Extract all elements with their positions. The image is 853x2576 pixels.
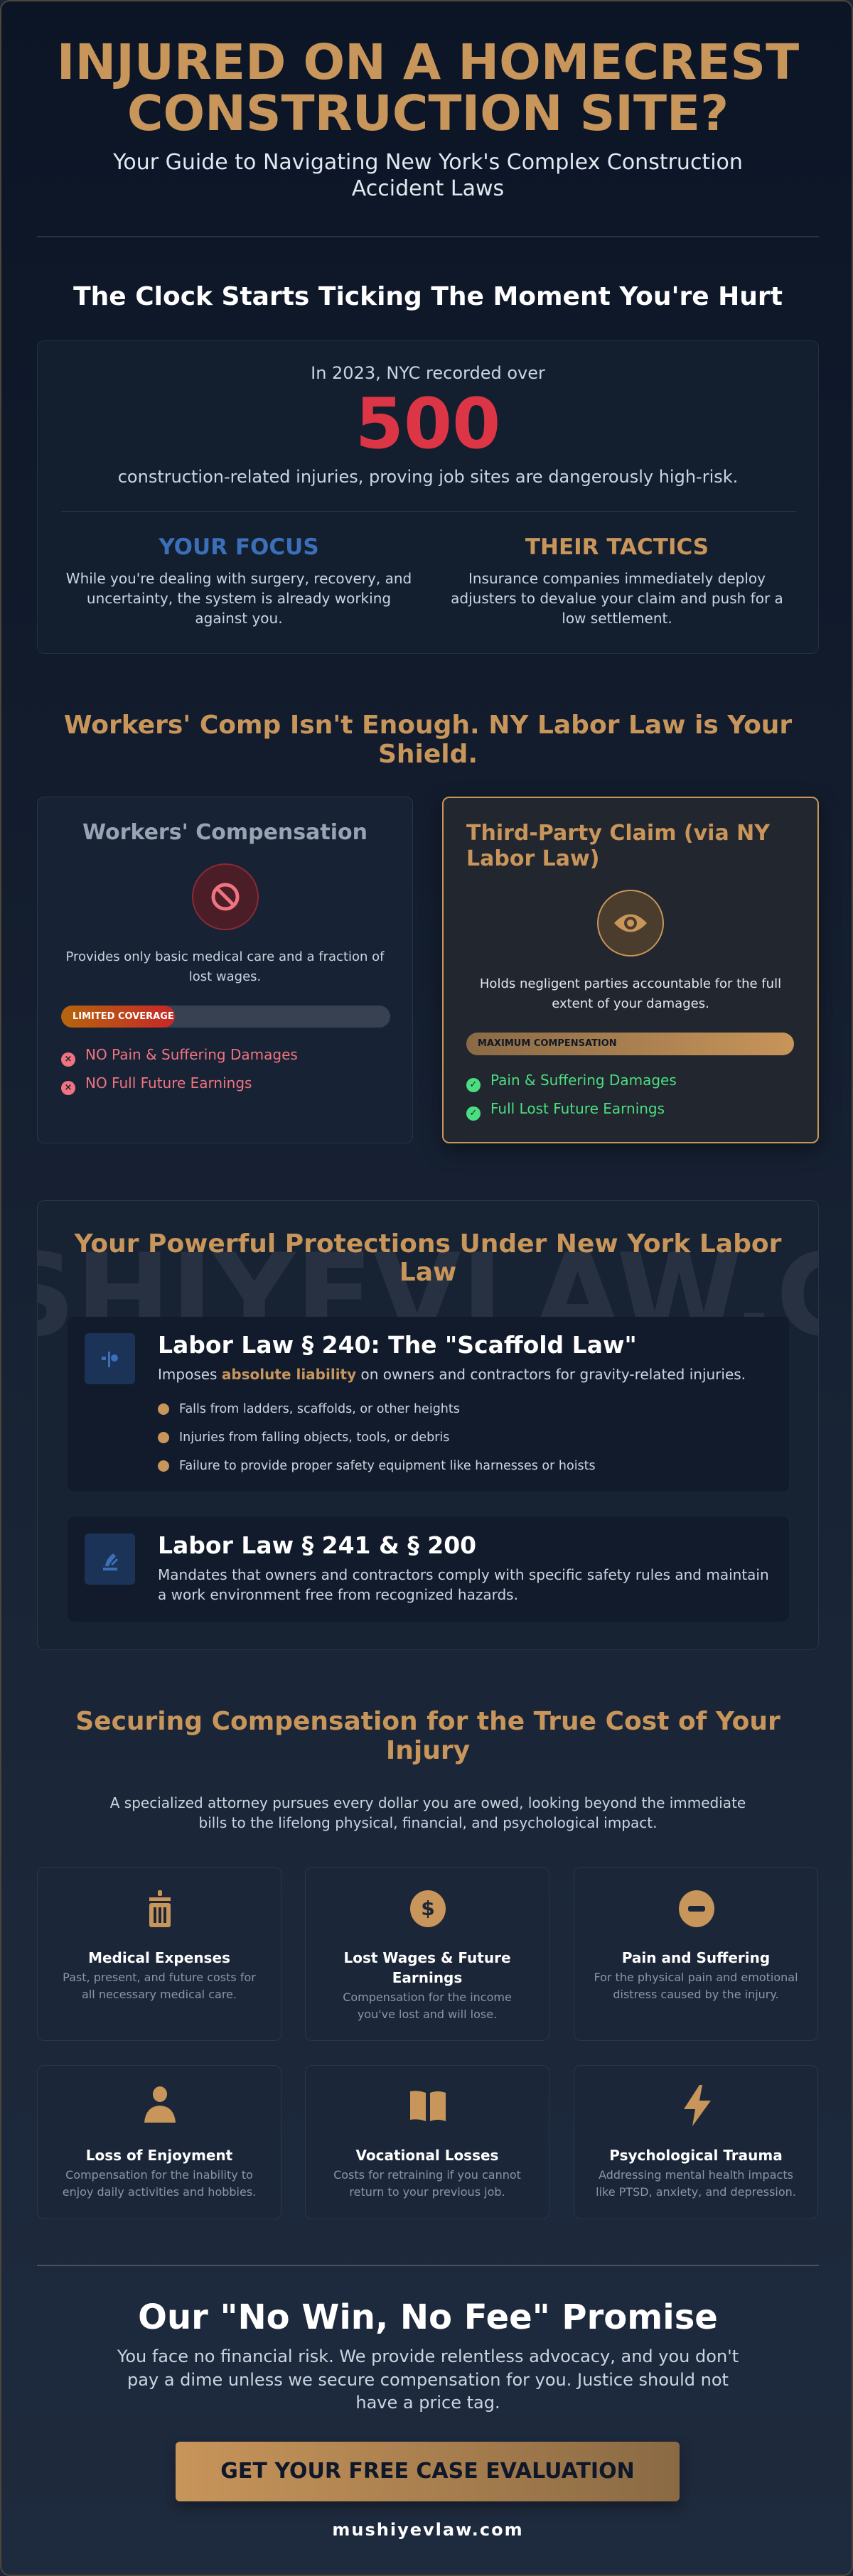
card: psychological trauma: Psychological Trauma xyxy=(609,2147,783,2164)
title xyxy=(57,34,799,142)
icon: coin xyxy=(410,1890,446,1927)
heading: protections xyxy=(74,1229,782,1287)
subtitle xyxy=(113,150,743,201)
stat intro: In 2023, NYC recorded over xyxy=(311,363,545,383)
list: positives: Pain & Suffering Damages xyxy=(490,1072,677,1089)
promise paragraph: You face no financial risk. We provide relentless advocacy, and you don't xyxy=(117,2346,739,2366)
heading: compensation: Injury xyxy=(386,1736,470,1765)
card text xyxy=(480,976,781,1011)
icon: coin: $ xyxy=(421,1897,435,1920)
card: loss of enjoyment xyxy=(37,2065,281,2219)
card text: a work environment free from recognized hazards. xyxy=(158,1586,518,1603)
button: cta xyxy=(176,2442,680,2501)
card text xyxy=(65,949,385,984)
subtitle: Your Guide to Navigating New York's Complex Construction xyxy=(113,150,743,175)
card text: Mandates that owners and contractors comply with specific safety rules and maintain xyxy=(158,1566,769,1583)
intro paragraph xyxy=(110,1794,746,1831)
card: lost wages xyxy=(305,1867,549,2041)
card: medical expenses xyxy=(37,1867,281,2041)
promise paragraph xyxy=(117,2346,739,2413)
list: positives: ✓ xyxy=(470,1079,477,1090)
card title: Workers' Compensation xyxy=(82,820,368,845)
bar: maximum compensation: MAXIMUM COMPENSATION xyxy=(478,1038,617,1049)
card: loss of enjoyment: Loss of Enjoyment xyxy=(86,2147,232,2164)
card: vocational losses: return to your previous job. xyxy=(349,2185,505,2199)
list: negatives: NO Pain & Suffering Damages xyxy=(85,1046,298,1063)
card: loss of enjoyment: enjoy daily activities and hobbies. xyxy=(63,2185,256,2199)
list: negatives xyxy=(61,1046,298,1095)
promise paragraph: pay a dime unless we secure compensation for you. Justice should not xyxy=(127,2369,729,2389)
card text xyxy=(158,1566,769,1603)
bar: limited coverage xyxy=(61,1006,390,1028)
column: their tactics: Insurance companies immediately deploy xyxy=(468,570,766,587)
list: covered injuries: Injuries from falling objects, tools, or debris xyxy=(179,1430,449,1445)
column: your focus xyxy=(66,534,412,627)
card: lost wages: you've lost and will lose. xyxy=(358,2008,497,2021)
card: medical expenses: Past, present, and future costs for xyxy=(63,1971,256,1984)
list: negatives: × xyxy=(65,1054,72,1065)
card: lost wages: Compensation for the income xyxy=(343,1990,512,2004)
card text: Provides only basic medical care and a fraction of xyxy=(65,949,385,964)
intro paragraph: A specialized attorney pursues every dollar you are owed, looking beyond the immediate xyxy=(110,1794,746,1811)
card: vocational losses xyxy=(305,2065,549,2219)
list: positives xyxy=(466,1072,677,1121)
bar: limited coverage: LIMITED COVERAGE xyxy=(73,1011,174,1022)
card: vocational losses: Costs for retraining if you cannot xyxy=(333,2168,521,2182)
card title xyxy=(466,821,771,871)
card title: Labor Law § 241 & § 200 xyxy=(158,1531,476,1559)
column: your focus: YOUR FOCUS xyxy=(159,534,319,560)
icon: eye xyxy=(597,890,664,956)
card: pain and suffering: distress caused by the injury. xyxy=(613,1988,779,2001)
card: psychological trauma: Addressing mental health impacts xyxy=(599,2168,793,2182)
card title: Third-Party Claim (via NY xyxy=(466,821,770,846)
icon: bolt xyxy=(684,2085,711,2126)
grid: damages xyxy=(37,1867,818,2219)
panel: workers compensation xyxy=(37,797,413,1143)
card: pain and suffering: Pain and Suffering xyxy=(622,1949,770,1966)
stat caption: construction-related injuries, proving job sites are dangerously high-risk. xyxy=(118,467,738,487)
panel: third-party claim xyxy=(442,797,819,1143)
card text: Holds negligent parties accountable for the full xyxy=(480,976,781,991)
icon: person xyxy=(144,2086,176,2123)
column: your focus: uncertainty, the system is already working xyxy=(87,590,391,607)
heading: compensation xyxy=(75,1707,780,1765)
list: positives: Full Lost Future Earnings xyxy=(490,1100,665,1117)
button: cta: GET YOUR FREE CASE EVALUATION xyxy=(220,2459,635,2484)
column: your focus: While you're dealing with surgery, recovery, and xyxy=(66,570,412,587)
list: negatives: NO Full Future Earnings xyxy=(85,1074,252,1092)
card: psychological trauma: like PTSD, anxiety, and depression. xyxy=(596,2185,796,2199)
title: INJURED ON A HOMECREST xyxy=(57,34,799,91)
list: positives: ✓ xyxy=(470,1108,477,1119)
icon: medical xyxy=(149,1890,171,1927)
list: covered injuries xyxy=(158,1402,596,1473)
list: negatives: × xyxy=(65,1082,72,1093)
card: lost wages: Lost Wages & Future xyxy=(343,1949,511,1966)
icon: minus circle xyxy=(679,1890,714,1927)
card text: extent of your damages. xyxy=(552,996,709,1011)
card: pain and suffering xyxy=(574,1867,818,2041)
stat number: 500 xyxy=(355,384,500,465)
intro paragraph: bills to the lifelong physical, financial, and psychological impact. xyxy=(199,1814,657,1831)
icon: gavel xyxy=(85,1534,135,1585)
list: covered injuries: Falls from ladders, scaffolds, or other heights xyxy=(179,1402,460,1416)
card: medical expenses: all necessary medical care. xyxy=(82,1988,237,2001)
icon: scaffold xyxy=(85,1333,135,1384)
card text: lost wages. xyxy=(189,969,261,984)
panel: stats xyxy=(37,340,819,654)
heading: workers comp: Workers' Comp Isn't Enough. NY Labor Law is Your xyxy=(64,711,792,740)
card: loss of enjoyment: Compensation for the inability to xyxy=(65,2168,253,2182)
heading: clock: The Clock Starts Ticking The Moment You're Hurt xyxy=(73,282,783,311)
panel: protections xyxy=(37,1200,819,1650)
heading: protections: Law xyxy=(399,1258,456,1287)
heading: compensation: Securing Compensation for the True Cost of Your xyxy=(75,1707,780,1736)
footer url: mushiyevlaw.com xyxy=(332,2520,524,2540)
card: labor law 241 & 200 xyxy=(68,1516,789,1622)
title: CONSTRUCTION SITE? xyxy=(127,85,729,142)
icon: ban xyxy=(192,863,259,930)
card: lost wages: Earnings xyxy=(392,1969,462,1986)
promise paragraph: have a price tag. xyxy=(355,2393,500,2413)
card: psychological trauma xyxy=(574,2065,818,2219)
column: their tactics: THEIR TACTICS xyxy=(525,534,709,560)
bar: maximum compensation xyxy=(466,1033,794,1055)
column: their tactics xyxy=(451,534,783,627)
card: vocational losses: Vocational Losses xyxy=(356,2147,498,2164)
card title: Labor Law) xyxy=(466,846,599,871)
heading: workers comp xyxy=(64,711,792,769)
column: their tactics: low settlement. xyxy=(562,610,672,627)
subtitle: Accident Laws xyxy=(352,176,504,201)
heading: workers comp: Shield. xyxy=(378,740,478,769)
column: their tactics: adjusters to devalue your claim and push for a xyxy=(451,590,783,607)
icon: book xyxy=(410,2091,446,2121)
card title: Labor Law § 240: The "Scaffold Law" xyxy=(158,1331,637,1359)
card: pain and suffering: For the physical pain and emotional xyxy=(594,1971,798,1984)
heading: protections: Your Powerful Protections Under New York Labor xyxy=(75,1229,781,1259)
card text: Imposes absolute liability on owners and contractors for gravity-related injuries. xyxy=(158,1366,746,1383)
list: covered injuries: Failure to provide proper safety equipment like harnesses or hoists xyxy=(179,1459,596,1473)
card: labor law 240 xyxy=(68,1317,789,1492)
heading: no win no fee: Our "No Win, No Fee" Promise xyxy=(138,2297,718,2337)
card: medical expenses: Medical Expenses xyxy=(88,1949,230,1966)
column: your focus: against you. xyxy=(195,610,283,627)
